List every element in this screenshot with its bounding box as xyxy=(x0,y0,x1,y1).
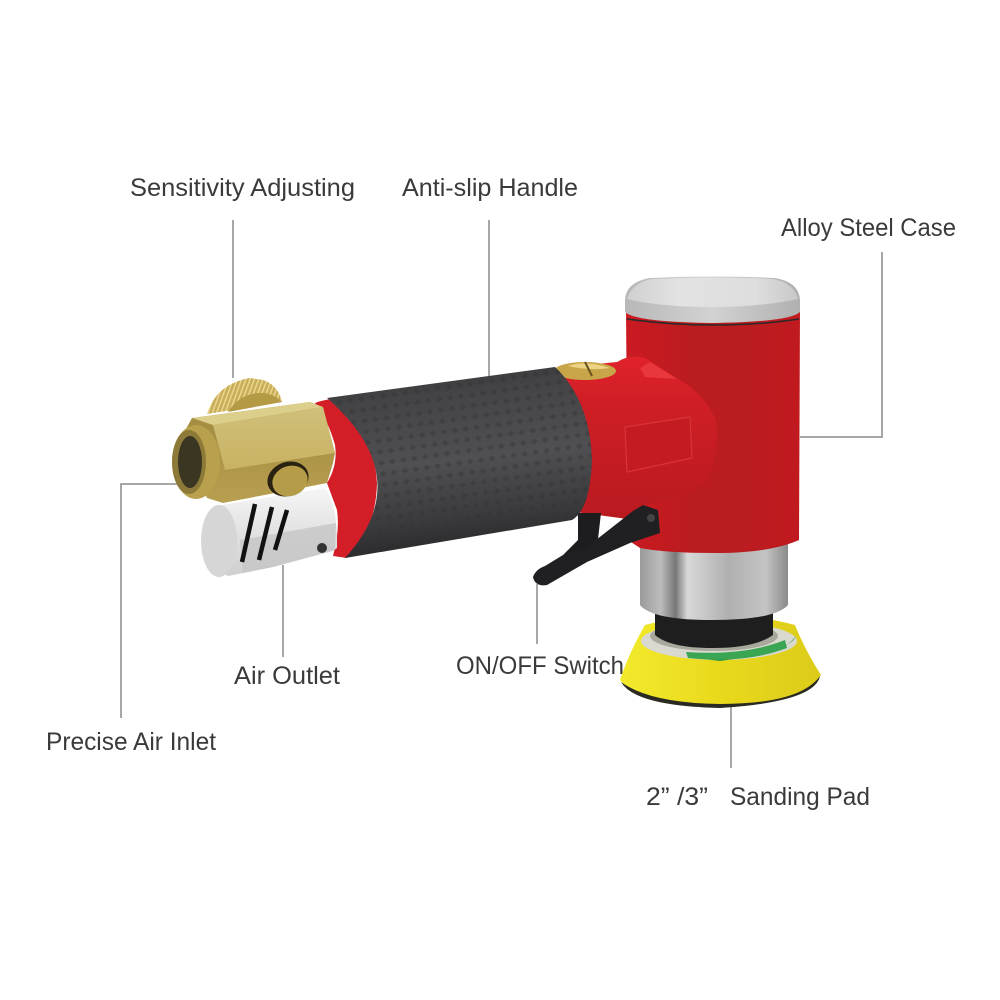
sanding pad xyxy=(620,615,821,708)
chrome air outlet xyxy=(201,488,337,577)
callout: Sensitivity Adjusting: Sensitivity Adjusting xyxy=(130,174,355,202)
callout: Sanding Pad: Sanding Pad xyxy=(730,783,870,811)
infographic: air sander product diagram xyxy=(48,178,955,810)
callout: ON/OFF Switch: ON/OFF Switch xyxy=(456,652,624,680)
black collar xyxy=(655,612,773,648)
product: air sander xyxy=(172,276,821,708)
callout: Air Outlet xyxy=(234,565,340,690)
metal top cap xyxy=(625,276,800,325)
chrome ring xyxy=(640,540,788,620)
threaded port xyxy=(172,425,220,499)
red housing xyxy=(555,357,717,520)
callout: Precise Air Inlet: Precise Air Inlet xyxy=(46,728,216,756)
callout: Anti-slip Handle: Anti-slip Handle xyxy=(402,174,578,202)
small brass button xyxy=(262,456,314,502)
anti-slip handle grip xyxy=(327,367,592,558)
callout: Sanding Pad xyxy=(646,705,870,811)
brass inlet block xyxy=(172,378,335,503)
callout: Air Outlet: Air Outlet xyxy=(234,662,340,690)
trigger lever xyxy=(533,505,660,585)
red case cylinder xyxy=(626,310,800,553)
callout: Alloy Steel Case: Alloy Steel Case xyxy=(781,214,956,242)
red collar ring xyxy=(315,399,377,558)
brass screw xyxy=(554,362,616,380)
callout: Precise Air Inlet xyxy=(46,484,216,756)
callout: Sanding Pad: 2” /3” xyxy=(646,783,708,811)
knurled knob xyxy=(207,378,282,414)
callout: Alloy Steel Case xyxy=(781,214,956,437)
